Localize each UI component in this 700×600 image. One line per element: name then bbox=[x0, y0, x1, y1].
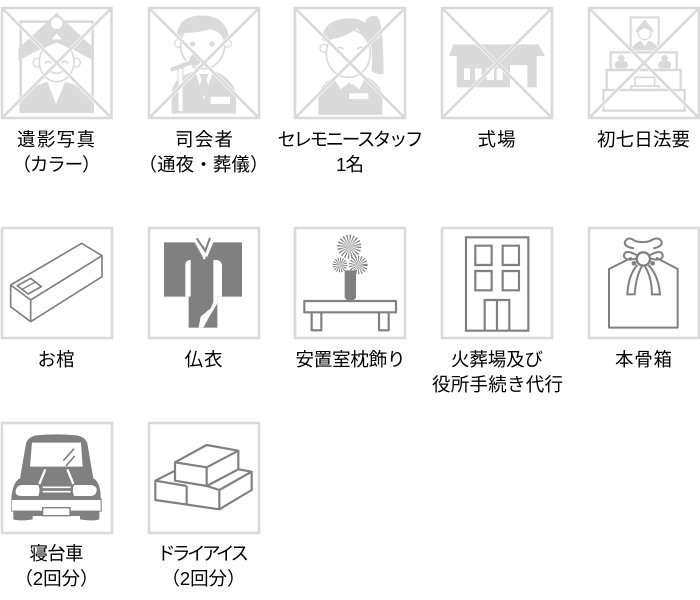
panel: 式場 bbox=[442, 8, 552, 150]
panel: 寝台車 bbox=[2, 423, 112, 589]
icon: wrapped urn box bbox=[589, 228, 699, 338]
label: 火葬場及び bbox=[451, 349, 543, 370]
panel: 遺影写真 bbox=[2, 8, 112, 175]
label: sub: 役所手続き代行 bbox=[432, 374, 563, 395]
label: 初七日法要 bbox=[597, 129, 690, 150]
label: お棺 bbox=[38, 349, 74, 370]
icon: crossed-out portrait photo bbox=[2, 8, 112, 118]
panel: お棺 bbox=[2, 228, 112, 370]
label: セレモニースタッフ bbox=[278, 129, 424, 150]
label: sub: 1 名 bbox=[336, 154, 364, 175]
label: 安置室枕飾り bbox=[296, 349, 406, 370]
label: sub: （カラー） bbox=[12, 154, 100, 175]
panel: 安置室枕飾り bbox=[295, 228, 406, 370]
label: 本骨箱 bbox=[615, 349, 672, 370]
icon: office building bbox=[442, 228, 552, 338]
icon: flower vase on table bbox=[295, 228, 405, 338]
icon: coffin bbox=[2, 228, 112, 338]
icon: dry ice blocks bbox=[149, 423, 259, 533]
panel: ドライアイス bbox=[149, 423, 259, 589]
label: sub: （2回分） bbox=[14, 568, 98, 589]
label: 遺影写真 bbox=[17, 129, 95, 150]
icon: crossed-out altar bbox=[589, 8, 699, 118]
icon: crossed-out MC with microphone bbox=[149, 8, 259, 118]
label: 仏衣 bbox=[184, 349, 222, 370]
label: 司会者 bbox=[175, 129, 233, 150]
label: 寝台車 bbox=[30, 543, 84, 564]
panel: 火葬場及び役所手続き代行 bbox=[432, 228, 563, 395]
panel: 初七日法要 bbox=[589, 8, 699, 150]
icon: crossed-out hall building bbox=[442, 8, 552, 118]
icon: hearse car front bbox=[2, 423, 112, 533]
label: sub: （通夜・葬儀） bbox=[138, 154, 268, 175]
panel: 本骨箱 bbox=[589, 228, 699, 370]
label: 式場 bbox=[478, 129, 516, 150]
label: sub: （2回分） bbox=[162, 568, 246, 589]
label: ドライアイス bbox=[157, 543, 249, 564]
panel: 仏衣 bbox=[149, 228, 259, 370]
panel: 司会者 bbox=[138, 8, 268, 175]
icon: kimono bbox=[149, 228, 259, 338]
panel: セレモニースタッフ bbox=[278, 8, 424, 175]
icon: crossed-out staff woman bbox=[295, 8, 405, 118]
